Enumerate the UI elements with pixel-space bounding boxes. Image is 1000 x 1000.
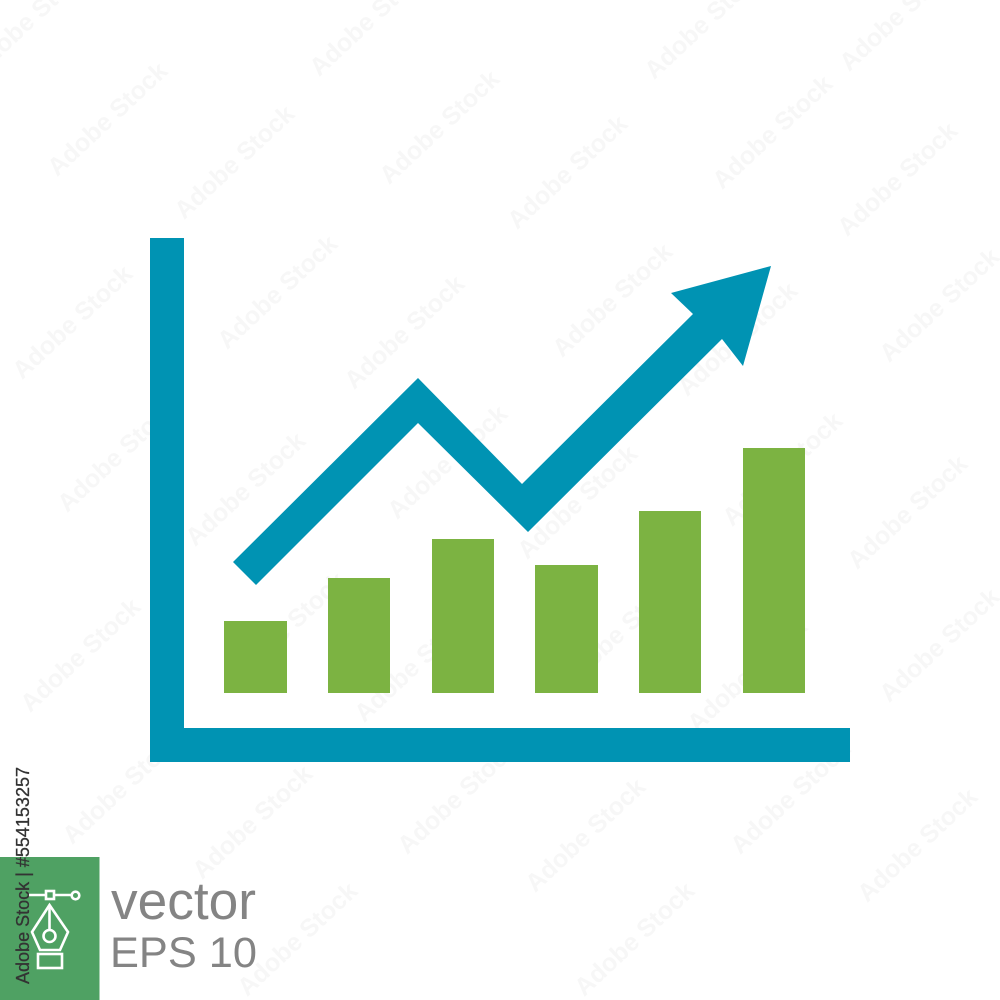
watermark pattern: Adobe Stock xyxy=(382,400,513,524)
bar 6 xyxy=(743,448,805,693)
watermark pattern: Adobe Stock xyxy=(374,65,505,189)
watermark pattern: Adobe Stock xyxy=(52,393,183,517)
watermark pattern: Adobe Stock xyxy=(717,407,848,531)
watermark pattern: Adobe Stock xyxy=(187,760,318,884)
watermark pattern: Adobe Stock xyxy=(339,270,470,394)
label: vector: vector xyxy=(111,872,256,931)
watermark pattern: Adobe Stock xyxy=(520,773,651,897)
watermark pattern: Adobe Stock xyxy=(349,603,480,727)
watermark pattern: Adobe Stock xyxy=(682,613,813,737)
watermark pattern: Adobe Stock xyxy=(169,100,300,224)
stock id caption: Adobe Stock | #554153257 xyxy=(13,767,33,984)
watermark pattern: Adobe Stock xyxy=(232,877,363,1000)
watermark pattern: Adobe Stock xyxy=(725,735,856,859)
icon: pen tool nib xyxy=(28,891,79,968)
label: EPS 10: EPS 10 xyxy=(110,929,257,977)
bar chart xyxy=(224,448,805,693)
watermark pattern: Adobe Stock xyxy=(180,427,311,551)
watermark pattern: Adobe Stock xyxy=(7,260,138,384)
watermark pattern: Adobe Stock xyxy=(842,450,973,574)
bar 5 xyxy=(639,511,701,693)
watermark pattern: Adobe Stock xyxy=(220,567,351,691)
bar 3 xyxy=(432,539,494,693)
watermark pattern: Adobe Stock xyxy=(547,238,678,362)
watermark pattern: Adobe Stock xyxy=(832,117,963,241)
watermark pattern: Adobe Stock xyxy=(852,783,983,907)
watermark pattern: Adobe Stock xyxy=(707,70,838,194)
chart axes xyxy=(150,238,850,762)
watermark pattern: Adobe Stock xyxy=(672,277,803,401)
icon: rising trend arrow xyxy=(233,266,771,585)
bar 2 xyxy=(328,578,390,693)
watermark pattern: Adobe Stock xyxy=(57,725,188,849)
watermark pattern: Adobe Stock xyxy=(15,593,146,717)
watermark pattern: Adobe Stock xyxy=(554,570,685,694)
watermark pattern: Adobe Stock xyxy=(502,110,633,234)
watermark pattern: Adobe Stock xyxy=(512,440,643,564)
watermark pattern: Adobe Stock xyxy=(42,57,173,181)
bar 1 xyxy=(224,621,287,693)
panel: vector badge xyxy=(0,857,100,1000)
watermark pattern: Adobe Stock xyxy=(569,877,700,1000)
watermark pattern: Adobe Stock xyxy=(212,230,343,354)
watermark pattern: Adobe Stock xyxy=(392,735,523,859)
bar 4 xyxy=(535,565,598,693)
